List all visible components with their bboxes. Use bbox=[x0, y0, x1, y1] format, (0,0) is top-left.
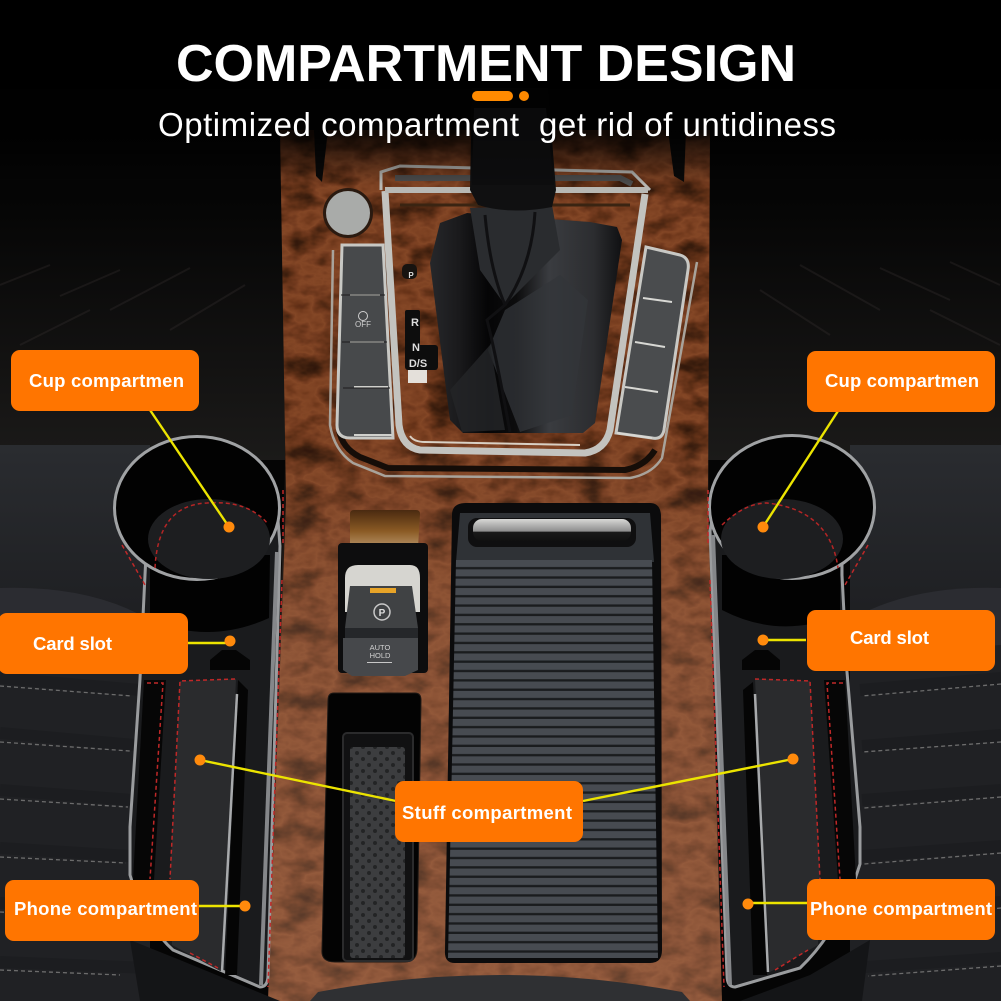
left phone slot bbox=[225, 680, 248, 975]
label: cup compartment right: Cup compartmen bbox=[825, 370, 979, 391]
right body bbox=[710, 520, 860, 987]
shutter handle bbox=[468, 518, 636, 547]
right cup bbox=[710, 436, 874, 578]
left cup floor bbox=[148, 499, 270, 579]
parking brake cavity: HOLD bbox=[370, 651, 391, 660]
left switch bank bbox=[337, 245, 393, 438]
left switch bank: OFF bbox=[355, 320, 371, 329]
left silver slit bbox=[222, 694, 237, 972]
title: COMPARTMENT DESIGN bbox=[176, 35, 796, 93]
parking brake cavity: AUTO bbox=[370, 643, 391, 652]
left inner rail bbox=[261, 552, 277, 985]
right seat stitches bbox=[862, 684, 1001, 976]
label: card slot right bbox=[807, 610, 995, 671]
label: cup compartment right bbox=[807, 351, 995, 412]
gear boot bbox=[430, 205, 622, 433]
small tray bbox=[322, 693, 421, 962]
carpet left bbox=[0, 200, 285, 460]
right center leather bbox=[755, 679, 820, 972]
label: phone compartment left: Phone compartment bbox=[14, 898, 197, 919]
right under-cup well bbox=[722, 555, 840, 626]
gear indicator: P bbox=[408, 271, 414, 280]
right card slot notch bbox=[742, 650, 780, 670]
leader lines bbox=[150, 410, 838, 906]
left cup stitch bbox=[155, 503, 268, 568]
gear indicator bbox=[402, 264, 438, 383]
right phone slot bbox=[743, 682, 767, 975]
label: card slot left: Card slot bbox=[33, 633, 112, 654]
label: stuff compartment bbox=[395, 781, 583, 842]
gear indicator: R bbox=[411, 317, 419, 329]
label: phone compartment left bbox=[5, 880, 199, 941]
left stitches bbox=[122, 490, 283, 987]
silver gear frame bbox=[381, 166, 650, 453]
start button bbox=[323, 188, 373, 238]
seat stitches bbox=[0, 686, 132, 975]
left seat bbox=[0, 445, 150, 1001]
seat rib shadows bbox=[0, 678, 150, 968]
lighter lower wood tint bbox=[268, 430, 722, 1001]
dark vents above console bbox=[314, 130, 686, 182]
armrest bottom bbox=[310, 975, 690, 1001]
left side pocket bbox=[133, 680, 166, 880]
shaft over overlay bbox=[472, 108, 554, 185]
subtitle: Optimized compartment get rid of untidiness bbox=[158, 106, 836, 143]
title accent bbox=[472, 91, 529, 101]
left center leather bbox=[170, 679, 236, 972]
inner recess shadow bbox=[339, 430, 655, 470]
leader dots bbox=[194, 522, 798, 912]
right seat bbox=[850, 445, 1001, 1001]
right cup stitch bbox=[722, 503, 838, 568]
label: stuff compartment: Stuff compartment bbox=[402, 802, 572, 823]
left cup bbox=[114, 436, 280, 580]
right inner rail bbox=[713, 535, 730, 985]
gear indicator: D/S bbox=[409, 358, 427, 370]
label: cup compartment left: Cup compartmen bbox=[29, 370, 184, 391]
perforated floor leather bbox=[130, 940, 870, 1001]
right side pocket bbox=[824, 680, 856, 880]
outer switch recess line bbox=[330, 250, 697, 478]
label: phone compartment right bbox=[807, 879, 995, 940]
top darkening overlay bbox=[0, 0, 1001, 185]
right silver slit bbox=[755, 694, 768, 972]
right organizer bbox=[708, 436, 874, 987]
gear indicator: N bbox=[412, 342, 420, 354]
right stitches bbox=[708, 490, 868, 987]
right switch bank bbox=[616, 247, 688, 438]
parking brake cavity bbox=[338, 510, 428, 676]
label: phone compartment right: Phone compartment bbox=[810, 898, 992, 919]
right seat rib shadows bbox=[850, 678, 1001, 968]
left card slot notch bbox=[210, 650, 250, 670]
left body bbox=[130, 520, 280, 987]
label: card slot left bbox=[0, 613, 188, 674]
label: card slot right: Card slot bbox=[850, 627, 929, 648]
gear shaft bbox=[470, 88, 556, 211]
left organizer bbox=[114, 436, 283, 987]
center console wood panel bbox=[268, 130, 722, 1001]
roller shutter bbox=[445, 503, 662, 963]
label: cup compartment left bbox=[11, 350, 199, 411]
right cup floor bbox=[721, 499, 843, 579]
parking brake cavity: P bbox=[379, 608, 386, 619]
carpet right bbox=[708, 200, 1001, 460]
left under-cup well bbox=[150, 555, 270, 632]
